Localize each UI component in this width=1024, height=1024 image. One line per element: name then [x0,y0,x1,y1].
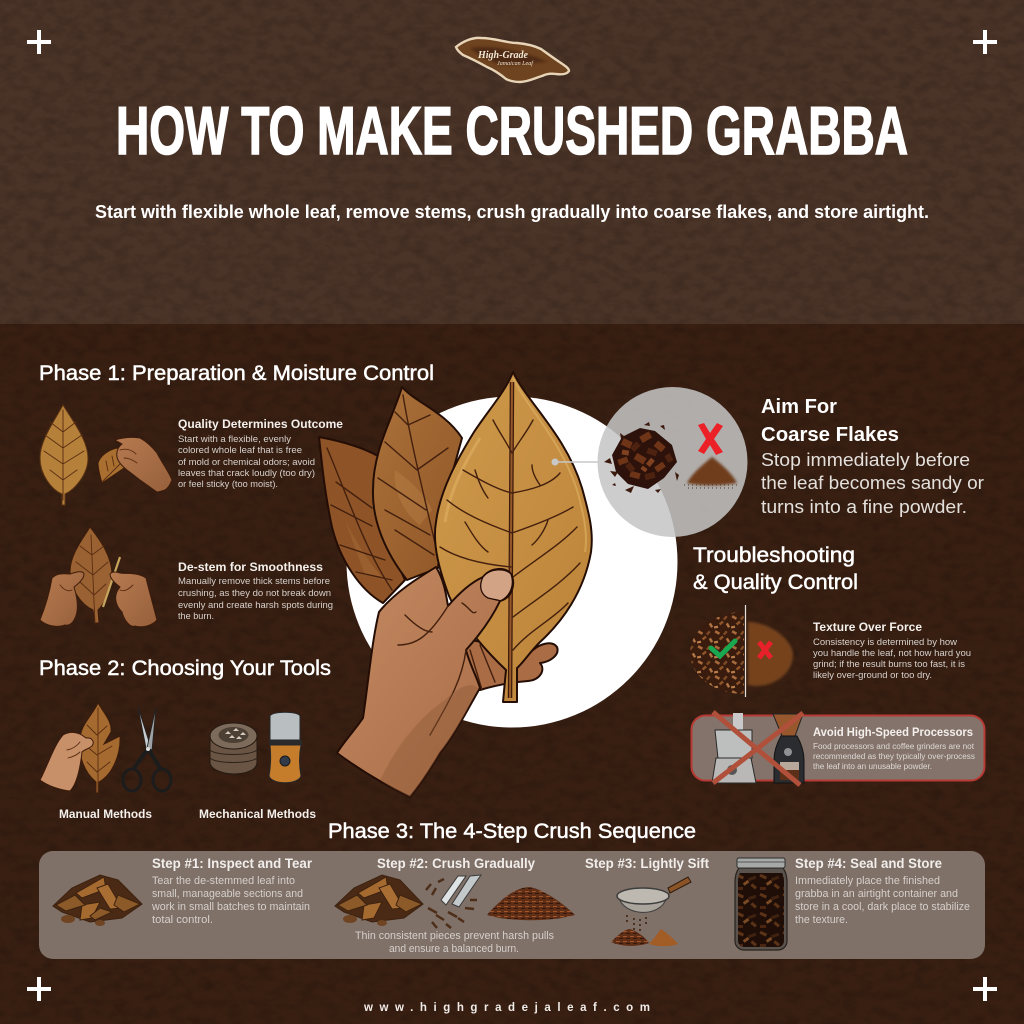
heading: troubleshooting: Troubleshooting [693,544,855,567]
icon: whole leaf [40,405,88,505]
text: texture over force [813,622,971,680]
step 4: store in a cool, dark place to stabilize [795,901,970,913]
text: quality determines outcome: Start with a flexible, evenly [178,433,291,444]
heading and text: aim for coarse flakes: turns into a fine powder. [761,496,967,517]
step 4: the texture. [795,914,848,926]
text: texture over force: Texture Over Force [813,622,922,634]
panel: avoid high-speed processors [692,712,984,785]
panel: 4-step sequence [39,851,985,959]
leaf: front golden leaf [435,372,592,702]
step 1: Step #1: Inspect and Tear [152,856,313,871]
panel: avoid high-speed processors: Avoid High-Speed Processors [813,727,973,739]
icon: sealed jar [735,858,787,950]
heading: phase 2: Phase 2: Choosing Your Tools [39,657,331,680]
footer: website: www.highgradejaleaf.com [363,1002,650,1014]
heading and text: aim for coarse flakes: Stop immediately before [761,449,970,470]
icon: coarse flake pile [604,422,679,493]
icon: red x [698,423,723,455]
callout: coarse flakes circle [552,387,748,537]
logo: Jamaica island badge: Jamaican Leaf [497,60,534,67]
heading: phase 1: Phase 1: Preparation & Moisture Control [39,362,434,385]
step 3: Step #3: Lightly Sift [585,856,709,871]
step 1 [53,856,313,926]
icon: falling particles [426,879,477,928]
heading and text: aim for coarse flakes [761,395,984,517]
step 1: work in small batches to maintain [151,901,310,913]
step 2: and ensure a balanced burn. [389,943,519,955]
hand: thumb and back of hand [337,567,513,797]
heading and text: aim for coarse flakes: Aim For [761,395,837,418]
step 4 [735,856,970,950]
hand: palm and fingers behind leaf [445,640,558,690]
connector line and dot [552,458,598,466]
heading: troubleshooting [693,544,858,594]
step 2 [335,856,575,955]
step 4: Step #4: Seal and Store [795,856,942,871]
icon: sieve [617,877,691,933]
step 3 [585,856,709,946]
heading: troubleshooting: & Quality Control [693,571,858,594]
text: de-stem for smoothness: crushing, as they do not break down [178,587,331,598]
icon: torn leaf pile [335,875,423,926]
text: de-stem for smoothness: Manually remove thick stems before [178,575,330,586]
icon: torn leaf pile [53,875,142,926]
text: texture over force: Consistency is determined by how [813,636,957,647]
text: quality determines outcome [178,419,343,489]
circle: white backdrop [346,396,678,728]
heading and text: aim for coarse flakes: the leaf becomes sandy or [761,472,984,493]
icon: powder pile [684,457,740,488]
logo: Jamaica island badge [456,38,569,82]
icon: hands removing stem [40,527,157,627]
icon: torn leaf held by hand [40,703,120,793]
step 1: Tear the de-stemmed leaf into [152,875,295,887]
subtitle: Start with flexible whole leaf, remove stems, crush gradually into coarse flakes, and store airtight. [95,201,929,222]
text: quality determines outcome: leaves that crack loudly (too dry) [178,467,315,478]
heading: phase 3: Phase 3: The 4-Step Crush Sequence [328,820,696,843]
step 4: grabba in an airtight container and [795,888,958,900]
logo: Jamaica island badge: High-Grade [477,49,528,61]
panel: avoid high-speed processors: Food processors and coffee grinders are not [813,742,975,751]
text: texture over force: likely over-ground or too dry. [813,669,932,680]
text: quality determines outcome: colored whole leaf that is free [178,444,302,455]
text: texture over force: you handle the leaf, not how hard you [813,647,971,658]
panel: avoid high-speed processors: the leaf into an unusable powder. [813,762,932,771]
icon: food processor [712,713,756,783]
icon: electric grinder [269,712,302,783]
illustration: hand holding three leaves [319,372,592,797]
leaf: left dark leaf [319,437,405,603]
text: quality determines outcome: of mold or chemical odors; avoid [178,456,315,467]
text: de-stem for smoothness: evenly and create harsh spots during [178,599,333,610]
icon: sifted piles [611,929,678,946]
text: de-stem for smoothness: the burn. [178,610,214,621]
icon: coffee grinder [773,714,804,783]
icon: scissors [123,707,171,791]
step 2: Step #2: Crush Gradually [377,856,535,871]
icon: crushing tool [441,875,481,907]
text: quality determines outcome: or feel sticky (too moist). [178,478,278,489]
heading and text: aim for coarse flakes: Coarse Flakes [761,423,899,446]
icon: texture comparison [690,605,798,697]
icon: herb grinder [210,723,257,774]
panel: avoid high-speed processors: recommended as they typically over-process [813,752,975,761]
icon: crossed out lines [713,712,803,785]
text: de-stem for smoothness [178,562,333,621]
icon: fine shred pile [487,887,575,920]
step 1: total control. [152,914,213,926]
label: manual methods: Manual Methods [59,809,152,821]
text: quality determines outcome: Quality Determines Outcome [178,419,343,431]
step 4: Immediately place the finished [795,875,940,887]
icon: hand flexing leaf [98,437,172,492]
leaf: middle leaf [373,387,462,580]
step 1: small, manageable sections and [152,888,303,900]
text: texture over force: grind; if the result burns too fast, it is [813,658,965,669]
label: mechanical methods: Mechanical Methods [199,809,316,821]
step 2: Thin consistent pieces prevent harsh pulls [355,930,554,942]
text: de-stem for smoothness: De-stem for Smoothness [178,562,323,574]
